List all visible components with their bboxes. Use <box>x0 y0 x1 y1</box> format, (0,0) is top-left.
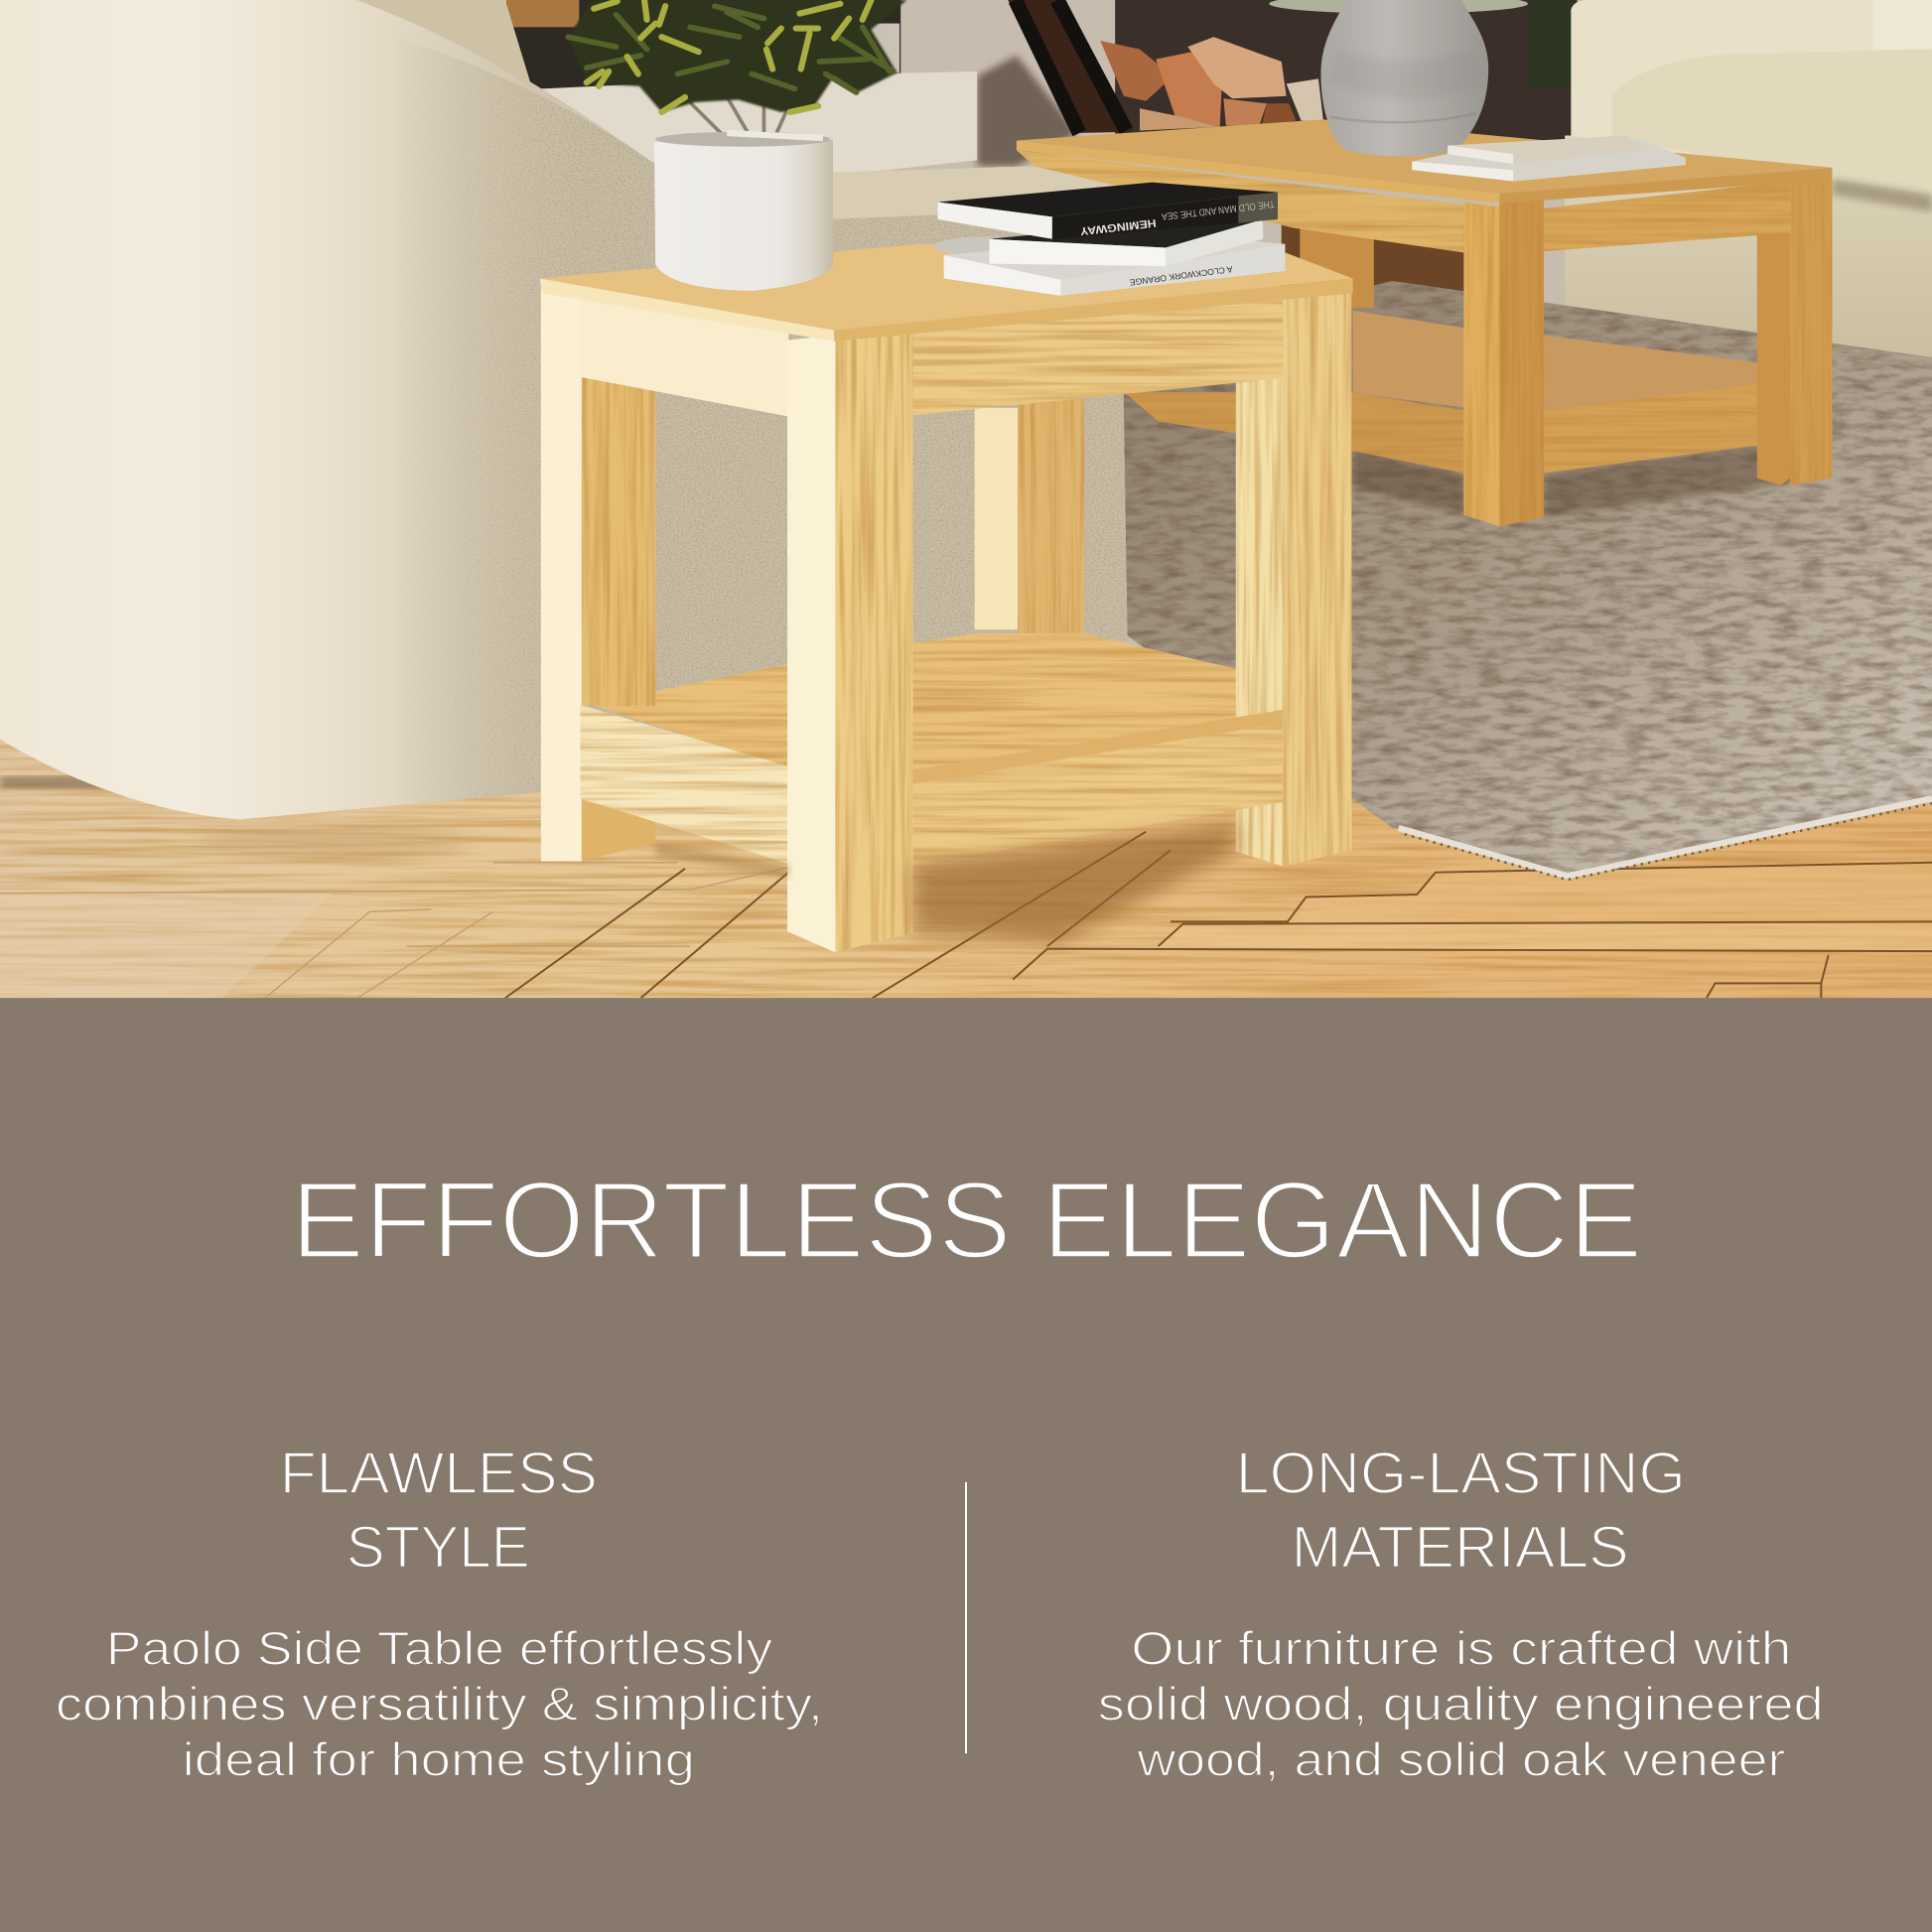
right heading: MATERIALS <box>1292 1514 1629 1581</box>
coffee table <box>1017 119 1832 526</box>
side table front leg light face <box>787 336 835 952</box>
panel: text background <box>0 998 1932 1932</box>
side table back leg <box>975 399 1084 642</box>
left body text <box>56 1622 823 1785</box>
left body text: Paolo Side Table effortlessly <box>106 1622 773 1675</box>
bottom book <box>944 234 1285 296</box>
title: EFFORTLESS ELEGANCE <box>291 1160 1642 1282</box>
side table front leg dark face <box>835 328 913 952</box>
side table right leg dark face <box>1283 288 1351 866</box>
right heading: LONG-LASTING <box>1236 1440 1686 1506</box>
left heading <box>280 1440 598 1581</box>
left heading: FLAWLESS <box>280 1440 598 1506</box>
coffee table lower left apron <box>1124 392 1463 474</box>
plant foliage mass <box>568 0 906 112</box>
side table left leg inner face <box>581 378 655 862</box>
firewood logs <box>1100 37 1323 131</box>
divider <box>965 1482 967 1753</box>
left heading: STYLE <box>346 1514 530 1581</box>
plant bright leaves <box>587 0 871 112</box>
coffee table upper right apron <box>1544 181 1790 251</box>
fireplace and wall background <box>506 0 1578 333</box>
right body text <box>1098 1622 1824 1785</box>
side table left leg light face <box>541 286 582 862</box>
rug <box>1109 281 1932 880</box>
right body text: solid wood, quality engineered <box>1098 1678 1824 1730</box>
floor plank seams <box>0 863 788 998</box>
side table left upper apron <box>581 296 788 416</box>
right body text: Our furniture is crafted with <box>1131 1622 1792 1675</box>
top book <box>937 183 1278 239</box>
coffee table front leg light face <box>1463 203 1499 526</box>
side table right upper apron <box>913 298 1283 415</box>
floor lighter planks <box>0 863 1932 998</box>
side table top <box>540 244 1353 331</box>
right body text: wood, and solid oak veneer <box>1136 1732 1785 1785</box>
right sofa <box>1565 0 1932 369</box>
plate <box>934 236 1037 256</box>
coffee table front leg dark face <box>1499 198 1544 526</box>
side table left lower apron <box>581 705 788 864</box>
side table plant pot <box>654 132 833 291</box>
left column <box>56 1440 823 1785</box>
vase <box>1320 0 1488 157</box>
shadow under side table <box>655 823 1236 942</box>
side table right lower apron <box>913 724 1283 865</box>
coffee table shelf <box>1352 310 1757 412</box>
top book: THE OLD MAN AND THE SEA <box>1161 198 1275 221</box>
side table <box>540 244 1353 952</box>
panel: room photo <box>0 0 1932 998</box>
right heading <box>1236 1440 1686 1581</box>
coffee table top <box>1017 119 1832 194</box>
plant <box>568 0 906 139</box>
floor <box>0 727 1932 998</box>
plant stems <box>690 86 791 139</box>
soft shadow under sofa <box>198 826 469 855</box>
coffee table upper left apron <box>1017 150 1463 252</box>
plant mid green leaves <box>568 6 894 92</box>
bottom book: A CLOCKWORK ORANGE <box>1129 264 1233 288</box>
middle book <box>990 219 1263 266</box>
side table right leg light face <box>1236 369 1283 866</box>
coffee table books <box>1412 136 1686 181</box>
left sofa <box>0 0 1128 819</box>
top book: HEMINGWAY <box>1079 216 1157 237</box>
log holder <box>1008 0 1134 133</box>
left body text: combines versatility & simplicity, <box>56 1678 823 1730</box>
coffee table inner right leg <box>1757 230 1790 485</box>
plant behind vase <box>1269 0 1575 88</box>
coffee table lower right apron <box>1544 379 1790 474</box>
coffee table right leg <box>1790 173 1832 485</box>
side table books <box>934 183 1285 296</box>
side table shelf <box>590 633 1283 770</box>
right column <box>1098 1440 1824 1785</box>
coffee table back leg <box>1300 228 1374 308</box>
left body text: ideal for home styling <box>183 1732 695 1785</box>
